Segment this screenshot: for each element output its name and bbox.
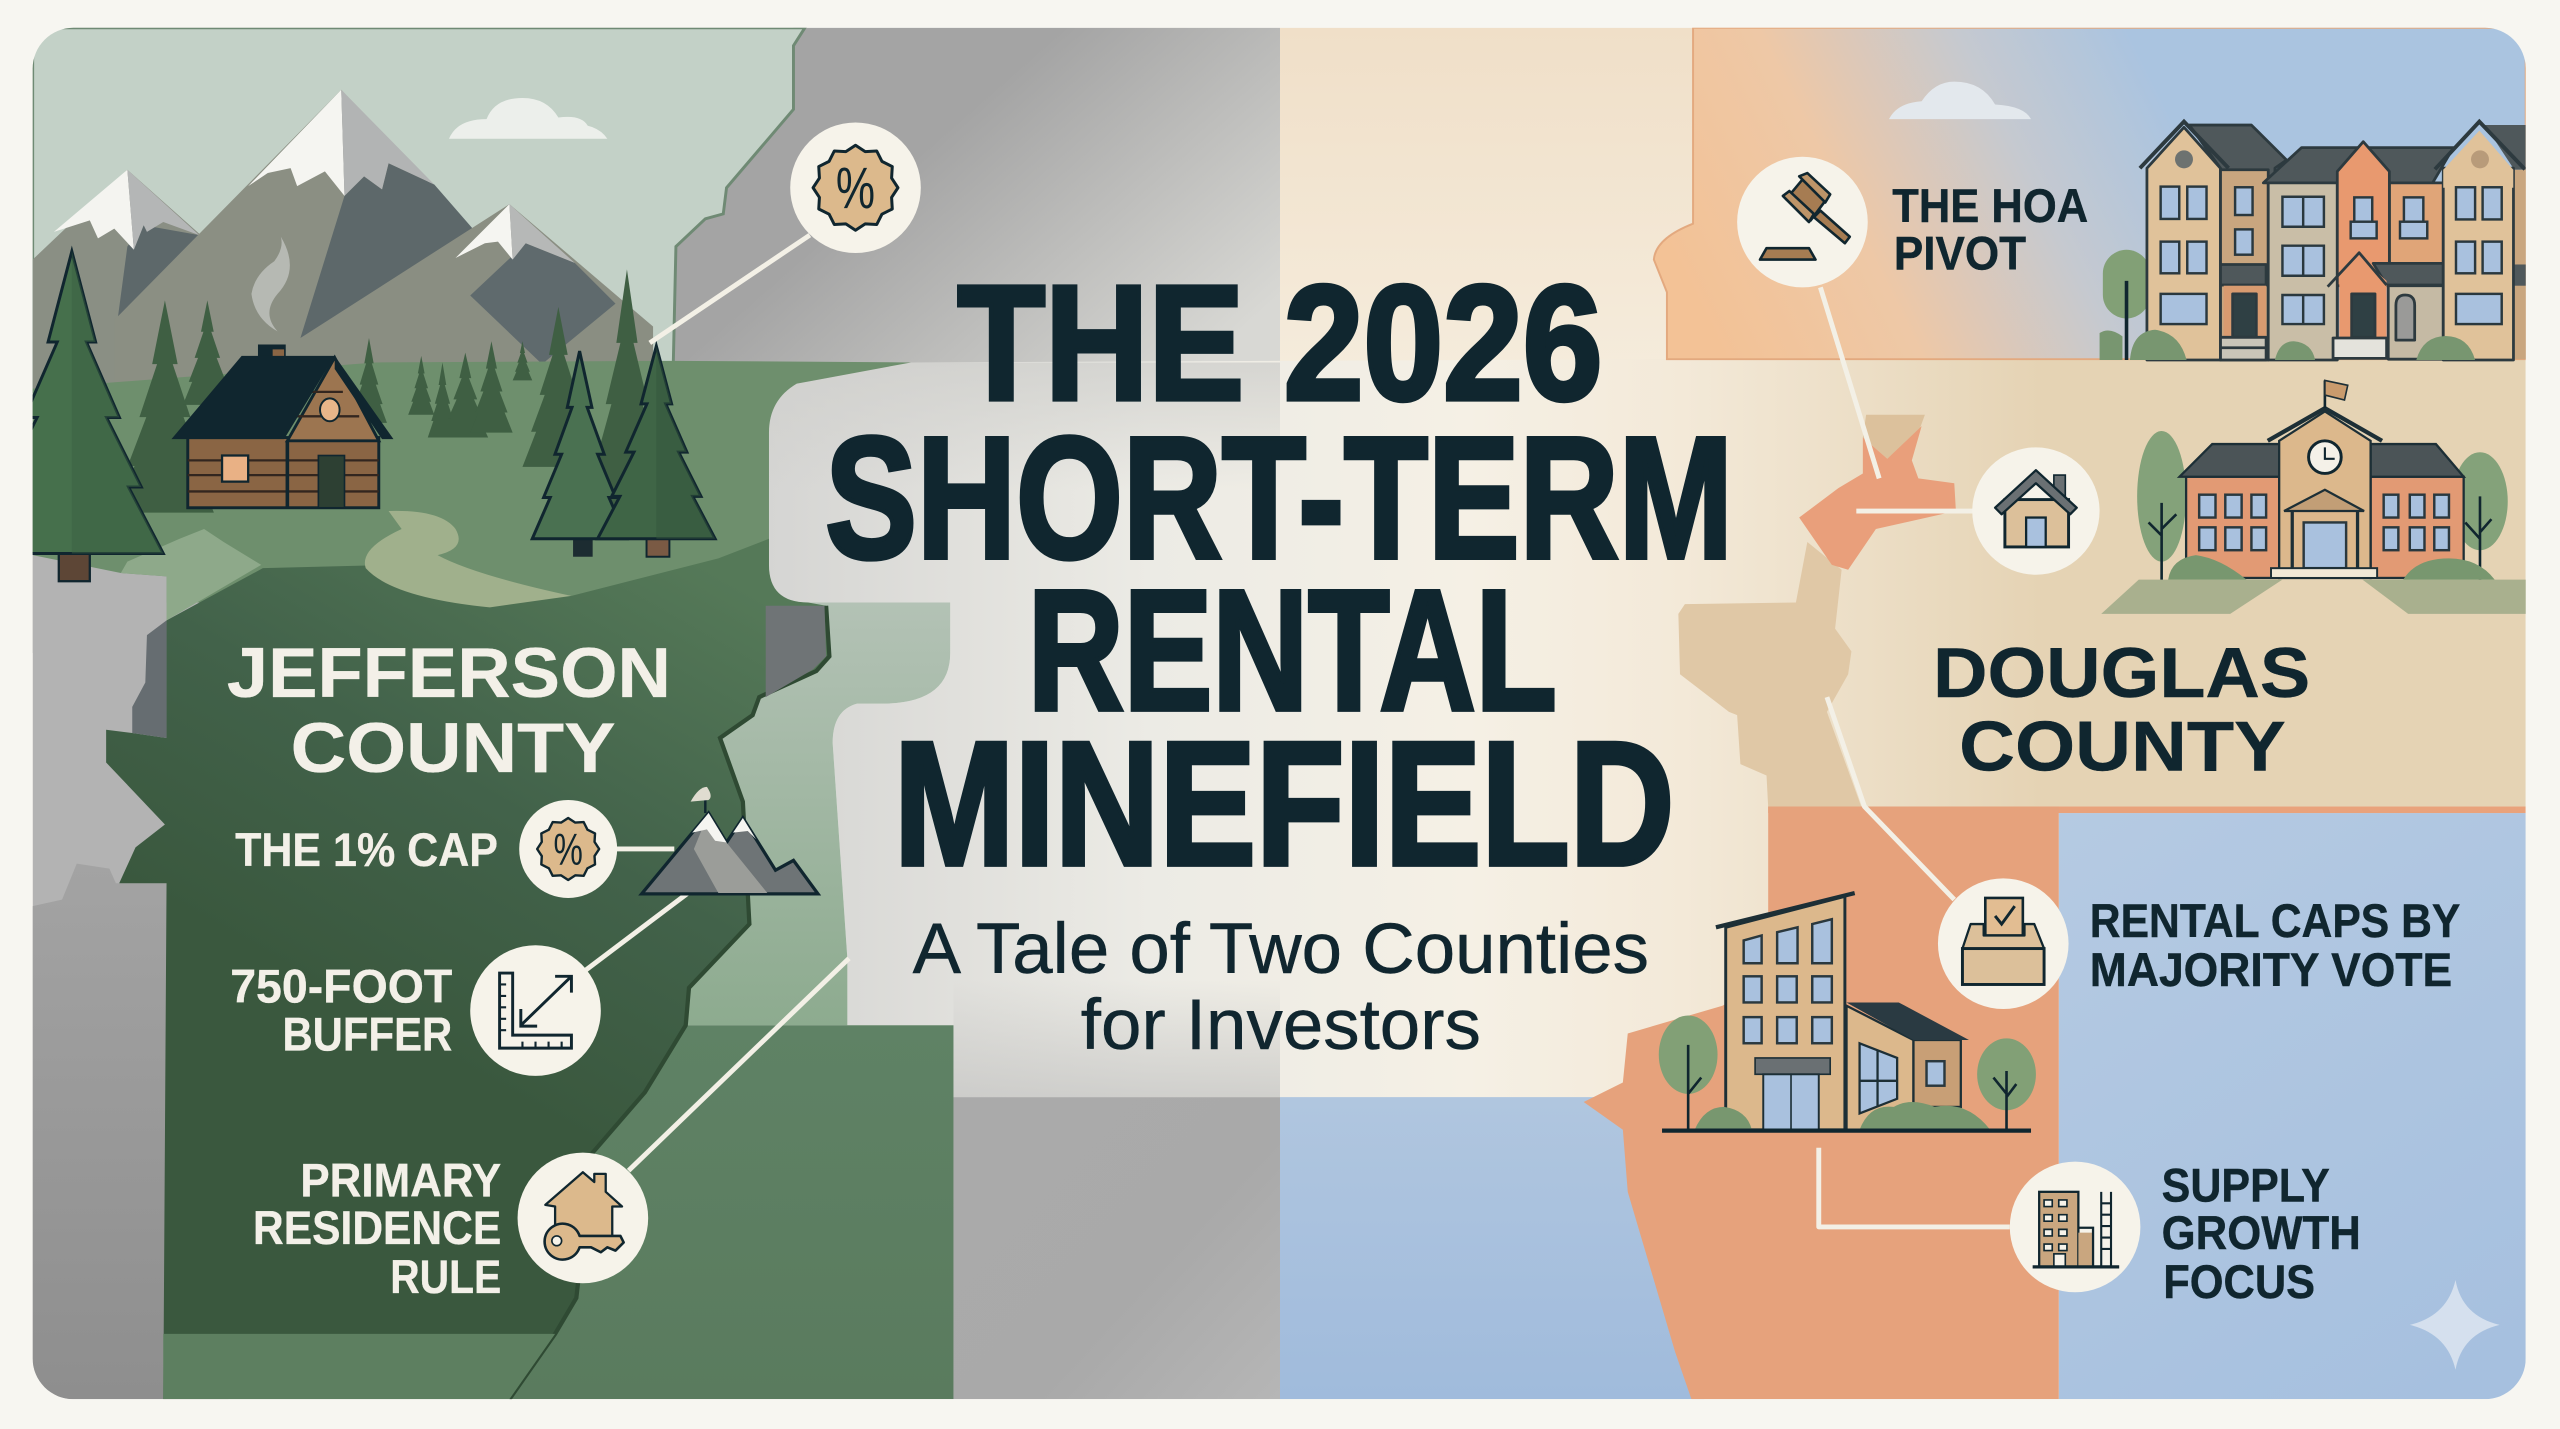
label: the HOA pivot: THE HOA xyxy=(1892,180,2088,233)
label: the 1% cap: THE 1% CAP xyxy=(235,824,498,877)
label: the HOA pivot xyxy=(1892,180,2088,280)
county border xyxy=(509,606,829,1399)
left tower back roof xyxy=(2189,125,2287,180)
lighter county strip, bottom xyxy=(163,1334,555,1399)
label: supply growth focus: SUPPLY xyxy=(2162,1160,2330,1213)
orange county body xyxy=(1584,807,2059,1399)
label: supply growth focus: GROWTH xyxy=(2162,1207,2361,1260)
chimney smoke xyxy=(251,237,290,331)
heading: Douglas County: COUNTY xyxy=(1959,707,2286,786)
label: supply growth focus xyxy=(2162,1160,2361,1309)
title: THE 2026 xyxy=(958,251,1602,434)
section two wall xyxy=(2220,170,2268,360)
darker gray land, lower left xyxy=(33,864,167,1399)
label: rental caps by majority vote: RENTAL CAPS BY xyxy=(2090,895,2460,948)
title: SHORT-TERM xyxy=(825,401,1733,595)
section three beige wall xyxy=(2263,148,2453,360)
illustration: town hall xyxy=(2101,380,2527,614)
shrubs xyxy=(2100,330,2475,360)
illustration: apartment building xyxy=(1659,893,2036,1131)
icon: percent badge, top: % xyxy=(836,156,875,221)
label: 750-foot buffer: BUFFER xyxy=(282,1009,452,1062)
panel top shading xyxy=(769,362,1280,490)
connector: supply growth xyxy=(1819,1148,2010,1227)
orange county strip under Douglas band xyxy=(1768,807,2526,813)
illustration: townhouses xyxy=(2100,122,2526,360)
connector: house xyxy=(1856,510,1974,513)
connector: top percent xyxy=(650,235,810,343)
subtitle xyxy=(913,909,1649,1065)
cloud, right xyxy=(1889,82,2031,119)
orange county piece near house icon xyxy=(1799,426,1956,570)
heading: Douglas County xyxy=(1933,633,2310,786)
heading: Jefferson County: JEFFERSON xyxy=(227,633,671,712)
gray inset patch, left xyxy=(132,620,167,738)
gray neighbouring land, left column xyxy=(32,555,200,1399)
label: the HOA pivot: PIVOT xyxy=(1894,227,2026,280)
left tower xyxy=(2140,122,2229,360)
icon: building under construction xyxy=(2010,1162,2140,1292)
label: primary residence rule: PRIMARY xyxy=(300,1155,501,1208)
connector: 1% cap xyxy=(616,847,674,850)
label: rental caps by majority vote xyxy=(2090,895,2460,997)
icon: house and key xyxy=(518,1153,648,1283)
subtitle: for Investors xyxy=(1081,985,1481,1065)
connector: gavel xyxy=(1820,287,1879,478)
title: RENTAL xyxy=(1028,555,1557,746)
label: primary residence rule xyxy=(253,1155,501,1304)
sage land right of county xyxy=(653,602,950,1025)
title: MINEFIELD xyxy=(894,705,1674,902)
icon: measuring ruler with arrow xyxy=(470,945,601,1076)
connector: primary residence xyxy=(629,958,849,1171)
large pine tree, left xyxy=(0,251,163,581)
icon: ballot box xyxy=(1938,878,2069,1009)
subtitle: A Tale of Two Counties xyxy=(913,909,1649,989)
winding path xyxy=(365,511,571,607)
heading: Douglas County: DOUGLAS xyxy=(1933,633,2310,712)
gray land, bottom centre xyxy=(953,1078,1280,1399)
background pine trees xyxy=(116,269,668,514)
small tan county piece xyxy=(1863,415,1925,459)
cloud, left xyxy=(449,98,607,139)
heading: Jefferson County: COUNTY xyxy=(291,708,616,787)
central title panel xyxy=(769,359,2526,1097)
icon: percent badge, 1% cap xyxy=(519,800,617,898)
heading: Jefferson County xyxy=(227,633,671,787)
sage sky over Jefferson xyxy=(33,28,805,392)
blue land, bottom right xyxy=(2059,813,2526,1399)
top right sky with peach county edge xyxy=(1654,28,2526,359)
blue land, bottom centre right xyxy=(1280,1078,1704,1399)
label: primary residence rule: RESIDENCE xyxy=(253,1202,501,1255)
orange sections xyxy=(2328,142,2443,359)
sparkle mark xyxy=(2410,1280,2500,1370)
tree beside townhouses xyxy=(2103,250,2150,360)
label: supply growth focus: FOCUS xyxy=(2163,1256,2315,1309)
label: 750-foot buffer xyxy=(230,960,452,1062)
gray inset patch xyxy=(766,606,826,697)
icon: percent badge, top xyxy=(790,122,921,253)
connector: ballot box xyxy=(1827,697,1954,900)
icon: gavel xyxy=(1737,157,1868,287)
icon: percent badge, 1% cap: % xyxy=(553,825,583,874)
meadow ground xyxy=(33,361,911,602)
tan Douglas county shape xyxy=(1678,542,1861,807)
label: primary residence rule: RULE xyxy=(390,1251,501,1304)
green land block, bottom xyxy=(509,1025,953,1399)
icon: house xyxy=(1972,447,2100,575)
mountain range xyxy=(33,90,653,428)
label: 750-foot buffer: 750-FOOT xyxy=(230,960,452,1013)
log cabin xyxy=(171,344,393,508)
light grass patch xyxy=(121,529,261,620)
gray land, top centre xyxy=(673,28,1280,392)
panel bottom shading xyxy=(953,980,1280,1097)
clock xyxy=(2309,441,2341,473)
connector: 750-foot buffer xyxy=(586,885,699,970)
small mountain marker xyxy=(642,787,818,894)
right tower xyxy=(2435,122,2526,360)
gray land under left tree xyxy=(33,555,167,653)
label: rental caps by majority vote: MAJORITY VOTE xyxy=(2090,944,2452,997)
Jefferson county shape xyxy=(106,539,829,1399)
cream land, top centre right xyxy=(1280,28,1704,379)
title xyxy=(825,251,1733,902)
pine pair, right xyxy=(532,346,715,557)
